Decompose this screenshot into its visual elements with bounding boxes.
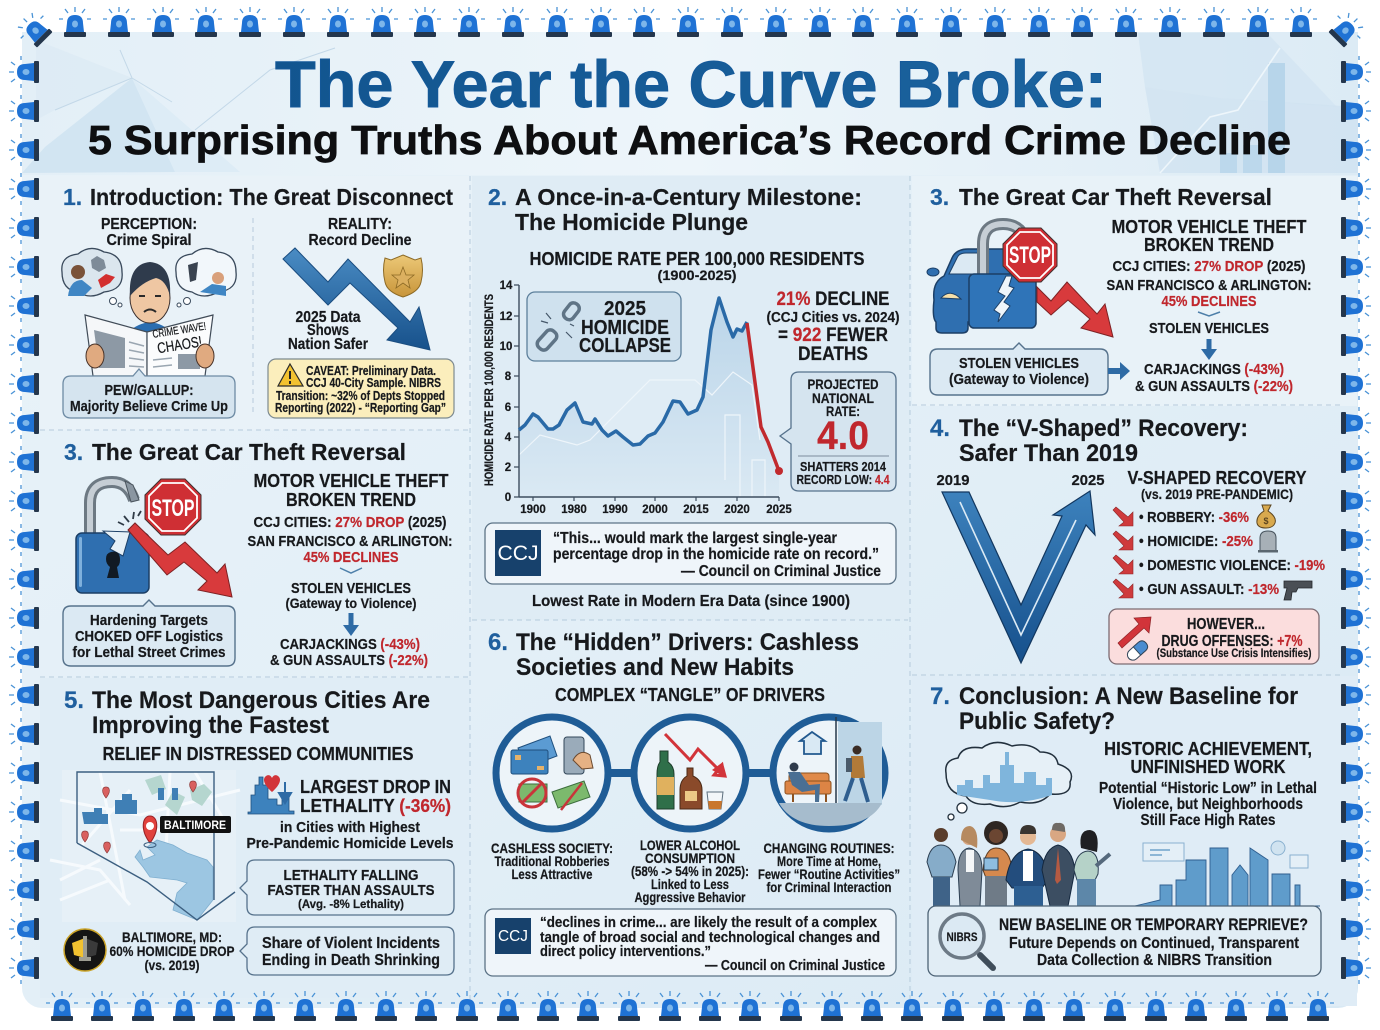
title: The Year the Curve Broke: — [275, 47, 1107, 121]
quote: ccj complex tangle: — Council on Criminal Justice — [705, 958, 885, 974]
icon: city with heart — [248, 775, 294, 814]
connected circles — [496, 717, 885, 829]
icon: car with broken padlock — [927, 224, 1036, 333]
panel: 2 homicide milestone — [482, 184, 900, 610]
line chart: homicide rate: 14 — [500, 280, 513, 292]
illustration: worried man reading newspaper: CHAOS! — [156, 333, 203, 357]
text: baltimore md: BALTIMORE, MD: — [122, 929, 222, 945]
illustration: worried man reading newspaper: CRIME WAVE! — [152, 321, 207, 341]
line chart: homicide rate: 2025 — [766, 504, 792, 516]
chart title: (1900-2025) — [658, 267, 736, 283]
heading: 6. — [488, 629, 508, 656]
heading: The Great Car Theft Reversal — [92, 439, 406, 465]
text: 2025 data — [288, 309, 368, 353]
callout: projected national rate: RECORD LOW: 4.4 — [796, 472, 890, 487]
line chart: homicide rate: 0 — [505, 492, 511, 504]
icon: police badge — [384, 255, 422, 297]
callout: pew gallup — [63, 369, 235, 418]
caption: changing routines: for Criminal Interaction — [766, 880, 892, 895]
quote: ccj complex tangle: tangle of broad social and technological changes and — [540, 929, 880, 946]
callout: projected national rate: RATE: — [826, 403, 860, 419]
callout: drug offenses — [1109, 609, 1319, 664]
list: robbery: $ — [1263, 516, 1269, 526]
callout: hardening targets: Hardening Targets — [90, 612, 208, 629]
text: broken trend: & GUN ASSAULTS (-22%) — [270, 652, 428, 669]
callout: pew gallup: Majority Believe Crime Up — [70, 398, 228, 415]
illustration: worried man reading newspaper — [62, 248, 236, 376]
heading: 3. — [930, 184, 949, 210]
line chart: homicide rate: HOMICIDE RATE PER 100,000 RESIDENTS — [482, 294, 496, 486]
line chart: homicide rate: 8 — [505, 371, 512, 383]
text: 2025 data: Shows — [307, 322, 349, 339]
heading: Safer Than 2019 — [959, 440, 1138, 467]
text: baltimore md: (vs. 2019) — [144, 957, 200, 973]
icon: nibrs magnifier — [940, 914, 993, 968]
heading: Societies and New Habits — [516, 654, 794, 681]
callout: 2025 homicide collapse: 2025 — [604, 298, 646, 320]
line chart: homicide rate: 2 — [505, 462, 511, 474]
reality label: REALITY: — [328, 216, 392, 233]
text: largest drop: Pre-Pandemic Homicide Levels — [246, 835, 454, 852]
callout: projected national rate: SHATTERS 2014 — [800, 459, 887, 474]
reality label — [308, 216, 412, 249]
text: historic achievement: HISTORIC ACHIEVEMENT, — [1104, 739, 1312, 759]
callout: share of violent incidents: Share of Violent Incidents — [262, 935, 440, 952]
caption: changing routines: Fewer “Routine Activities” — [758, 867, 900, 882]
line chart: homicide rate: 6 — [505, 402, 511, 414]
heading: Introduction: The Great Disconnect — [90, 184, 453, 210]
heading: 5. — [64, 687, 84, 714]
list: gun assault: • GUN ASSAULT: -13% — [1139, 581, 1279, 598]
callout: stolen vehicles: (Gateway to Violence) — [949, 372, 1089, 388]
callout: drug offenses: (Substance Use Crisis Intensifies) — [1156, 648, 1312, 660]
panel: 3 car theft (left) — [63, 439, 452, 669]
line chart: homicide rate: 4 — [505, 432, 512, 444]
text: v-shaped recovery: (vs. 2019 PRE-PANDEMIC) — [1141, 486, 1293, 502]
list: domestic violence: • DOMESTIC VIOLENCE: -19% — [1139, 557, 1325, 574]
text: broken trend: MOTOR VEHICLE THEFT — [1112, 217, 1307, 237]
list: homicide: • HOMICIDE: -25% — [1139, 533, 1253, 550]
text: broken trend: STOLEN VEHICLES — [1149, 320, 1269, 337]
text: historic achievement — [1099, 739, 1317, 829]
callout: new baseline: NEW BASELINE OR TEMPORARY REPRIEVE? — [999, 915, 1308, 934]
text: broken trend: CCJ CITIES: 27% DROP (2025) — [1112, 258, 1306, 275]
heading: 1. — [63, 184, 82, 210]
callout: share of violent incidents: Ending in Death Shrinking — [262, 952, 440, 969]
chart: v shape: 2019 — [936, 472, 970, 489]
caption: cashless society: Less Attractive — [512, 867, 593, 882]
panel: 6 hidden drivers — [485, 629, 900, 976]
section tints and dividers — [40, 176, 1357, 1006]
icon: home and street — [779, 717, 882, 826]
text: 2025 data: 2025 Data — [296, 309, 361, 326]
callout: caveat — [268, 359, 454, 418]
arrow: to carjackings — [1108, 362, 1130, 380]
text: baltimore md: 60% HOMICIDE DROP — [110, 943, 234, 959]
heading: Conclusion: A New Baseline for — [959, 683, 1298, 710]
text: broken trend: STOLEN VEHICLES — [291, 580, 411, 597]
icon: stop sign — [1003, 228, 1057, 282]
subtitle: 5 Surprising Truths About America’s Record Crime Decline — [88, 117, 1291, 163]
callout: projected national rate: NATIONAL — [812, 390, 874, 406]
callout: share of violent incidents — [240, 927, 454, 975]
text: broken trend: CARJACKINGS (-43%) — [280, 636, 420, 653]
heading: The Great Car Theft Reversal — [959, 184, 1272, 210]
heading: The “V-Shaped” Recovery: — [959, 415, 1248, 442]
heading — [488, 184, 862, 235]
line chart: homicide rate: 12 — [500, 311, 512, 323]
icon: broken padlock — [76, 481, 149, 593]
icon: falling red arrow — [128, 523, 232, 597]
text: 21 percent decline: (CCJ Cities vs. 2024) — [766, 310, 900, 326]
quote: ccj complex tangle: CCJ — [498, 928, 528, 945]
panel: 1 introduction — [62, 184, 454, 418]
text: broken trend: SAN FRANCISCO & ARLINGTON: — [1106, 277, 1312, 294]
callout: 2025 homicide collapse — [527, 292, 681, 361]
panel: 4 v-shaped recovery — [930, 415, 1325, 664]
callout: lethality falling: LETHALITY FALLING — [284, 867, 418, 884]
caption: lower alcohol: (58% -> 54% in 2025): — [631, 864, 749, 879]
siren border: right column — [1341, 56, 1371, 984]
line chart: homicide rate: 1900 — [520, 504, 546, 516]
heading — [64, 687, 430, 739]
icon: nibrs magnifier: NIBRS — [946, 930, 978, 944]
caption: lower alcohol: Linked to Less — [651, 877, 729, 892]
illustration: city skyline — [1135, 841, 1320, 906]
heading: Public Safety? — [959, 708, 1115, 735]
text: broken trend: BROKEN TREND — [286, 490, 416, 510]
callout: caveat: CAVEAT: Preliminary Data. — [306, 364, 436, 378]
quote: ccj single-year drop: — Council on Criminal Justice — [681, 563, 881, 580]
heading: Improving the Fastest — [92, 712, 329, 739]
text: broken trend: (Gateway to Violence) — [286, 595, 416, 611]
line chart: homicide rate: 1990 — [602, 504, 628, 516]
callout: lethality falling: FASTER THAN ASSAULTS — [268, 882, 434, 899]
heading: The “Hidden” Drivers: Cashless — [516, 629, 859, 656]
line chart: homicide rate: 1980 — [561, 504, 587, 516]
callout: lethality falling: (Avg. -8% Lethality) — [298, 897, 404, 911]
caption: lower alcohol: LOWER ALCOHOL — [640, 838, 740, 853]
list: homicide — [1113, 531, 1278, 552]
line chart: homicide rate — [482, 280, 792, 516]
text: broken trend: SAN FRANCISCO & ARLINGTON: — [248, 533, 452, 550]
quote: ccj single-year drop: percentage drop in the homicide rate on record.” — [553, 546, 879, 563]
line chart: homicide rate: 2020 — [724, 504, 750, 516]
line chart: homicide rate: 10 — [500, 341, 512, 353]
callout: lethality falling — [240, 860, 454, 915]
callout: drug offenses: DRUG OFFENSES: +7% — [1162, 633, 1302, 650]
callout: 2025 homicide collapse: COLLAPSE — [579, 335, 671, 357]
panel: 7 conclusion — [927, 683, 1321, 976]
callout: projected national rate: 4.0 — [817, 414, 869, 458]
callout: caveat: CCJ 40-City Sample. NIBRS — [306, 376, 441, 390]
heading — [930, 683, 1298, 735]
text: broken trend: CARJACKINGS (-43%) — [1144, 361, 1284, 378]
subheading: RELIEF IN DISTRESSED COMMUNITIES — [102, 744, 414, 764]
chart title: HOMICIDE RATE PER 100,000 RESIDENTS — [530, 249, 864, 269]
callout: stolen vehicles: STOLEN VEHICLES — [959, 356, 1079, 372]
callout: pew gallup: PEW/GALLUP: — [104, 382, 194, 399]
heading — [930, 415, 1248, 467]
text: largest drop: in Cities with Highest — [280, 819, 420, 836]
heading: The Most Dangerous Cities Are — [92, 687, 430, 714]
chart: v shape: 2025 — [1072, 472, 1104, 489]
icon: bottles and falling arrow — [657, 734, 725, 809]
list: gun assault — [1113, 579, 1312, 600]
quote: ccj complex tangle: direct policy interventions.” — [540, 943, 711, 960]
heading: 7. — [930, 683, 950, 710]
caption: cashless society: CASHLESS SOCIETY: — [491, 841, 613, 856]
text: historic achievement: UNFINISHED WORK — [1130, 757, 1286, 777]
icon: baltimore seal — [64, 929, 106, 971]
quote: ccj single-year drop: “This... would mark the largest single-year — [553, 530, 837, 547]
caption: lower alcohol: Aggressive Behavior — [634, 890, 746, 905]
callout: projected national rate: PROJECTED — [808, 376, 878, 392]
line chart: homicide rate: 2000 — [642, 504, 668, 516]
siren border: top row — [12, 7, 1369, 51]
callout: hardening targets: for Lethal Street Crimes — [72, 644, 226, 661]
text: 21 percent decline: DEATHS — [798, 344, 868, 365]
text: broken trend — [248, 471, 452, 669]
callout: drug offenses: HOWEVER... — [1187, 616, 1265, 633]
siren border: left column — [9, 56, 39, 984]
perception label: Crime Spiral — [106, 232, 192, 249]
map: baltimore — [50, 770, 240, 922]
heading — [488, 629, 859, 681]
icon: falling arrow — [283, 248, 430, 350]
heading: 3. — [64, 439, 83, 465]
text: largest drop: LARGEST DROP IN — [300, 776, 451, 797]
quote: ccj single-year drop — [485, 523, 896, 584]
text: 21 percent decline: = 922 FEWER — [778, 325, 888, 346]
list: robbery — [1113, 505, 1275, 528]
text: broken trend: & GUN ASSAULTS (-22%) — [1135, 378, 1293, 395]
heading: The Homicide Plunge — [515, 209, 748, 235]
text: broken trend: BROKEN TREND — [1144, 235, 1274, 255]
text: broken trend: MOTOR VEHICLE THEFT — [254, 471, 449, 491]
text: broken trend: CCJ CITIES: 27% DROP (2025) — [254, 514, 447, 531]
quote: ccj single-year drop: CCJ — [498, 542, 538, 565]
reality label: Record Decline — [308, 232, 412, 249]
icon: stop sign: STOP — [152, 495, 194, 522]
text: 21 percent decline: 21% DECLINE — [776, 289, 890, 310]
caption: cashless society: Traditional Robberies — [494, 854, 610, 869]
text: largest drop: LETHALITY (-36%) — [300, 795, 451, 816]
quote: ccj complex tangle — [485, 909, 896, 976]
callout: projected national rate — [780, 372, 896, 491]
text: v-shaped recovery: V-SHAPED RECOVERY — [1128, 468, 1306, 488]
callout: caveat: Reporting (2022) - “Reporting Gap” — [275, 401, 446, 415]
caption: changing routines: More Time at Home, — [777, 854, 881, 869]
text: baltimore md — [110, 929, 234, 973]
icon: cards, phone, no cash — [511, 736, 593, 810]
text: broken trend: 45% DECLINES — [1162, 293, 1256, 310]
panel: 5 dangerous cities — [50, 687, 454, 975]
text: historic achievement: Still Face High Rates — [1140, 812, 1276, 829]
caption: lower alcohol: CONSUMPTION — [645, 851, 735, 866]
caption: lowest rate: Lowest Rate in Modern Era Data (since 1900) — [532, 593, 850, 610]
chart title — [530, 249, 864, 283]
quote: ccj complex tangle: “declines in crime... are likely the result of a complex — [540, 914, 878, 931]
callout: new baseline: Data Collection & NIBRS Transition — [1037, 952, 1272, 969]
callout: hardening targets: CHOKED OFF Logistics — [75, 628, 223, 645]
caption: cashless society — [491, 841, 613, 882]
icon: falling red arrow — [1037, 282, 1113, 337]
heading: A Once-in-a-Century Milestone: — [515, 184, 862, 210]
caption: lower alcohol — [631, 838, 749, 905]
perception label — [101, 216, 197, 249]
subheading: COMPLEX “TANGLE” OF DRIVERS — [555, 685, 825, 705]
callout: new baseline: Future Depends on Continued, Transparent — [1009, 935, 1299, 952]
caption: changing routines: CHANGING ROUTINES: — [764, 841, 894, 856]
callout: stolen vehicles — [930, 343, 1108, 395]
text: historic achievement: Potential “Historic Low” in Lethal — [1099, 780, 1317, 797]
callout: new baseline — [928, 906, 1321, 976]
header band — [22, 32, 1358, 175]
text: broken trend — [1106, 217, 1312, 395]
callout: hardening targets — [63, 600, 235, 666]
callout: caveat: Transition: ~32% of Depts Stopped — [276, 389, 445, 403]
chart: v shape — [936, 472, 1104, 663]
text: broken trend: 45% DECLINES — [304, 549, 398, 566]
heading: 4. — [930, 415, 950, 442]
icon: thought cloud city — [946, 742, 1072, 820]
list: robbery: • ROBBERY: -36% — [1139, 509, 1249, 526]
text: 2025 data: Nation Safer — [288, 336, 368, 353]
text: largest drop — [246, 776, 454, 852]
text: historic achievement: Violence, but Neighborhoods — [1113, 796, 1303, 813]
heading: 2. — [488, 184, 507, 210]
perception label: PERCEPTION: — [101, 216, 197, 233]
text: v-shaped recovery — [1128, 468, 1306, 502]
illustration: group of people — [927, 821, 1110, 906]
panel: 3 car theft (right) — [927, 184, 1312, 395]
map: baltimore: BALTIMORE — [164, 818, 226, 832]
callout: 2025 homicide collapse: HOMICIDE — [581, 317, 669, 339]
caption: changing routines — [758, 841, 900, 895]
siren border: bottom row — [46, 991, 1334, 1021]
line chart: homicide rate: 2015 — [683, 504, 709, 516]
icon: stop sign — [145, 479, 201, 535]
text: 21 percent decline — [766, 289, 900, 365]
icon: stop sign: STOP — [1009, 242, 1051, 269]
